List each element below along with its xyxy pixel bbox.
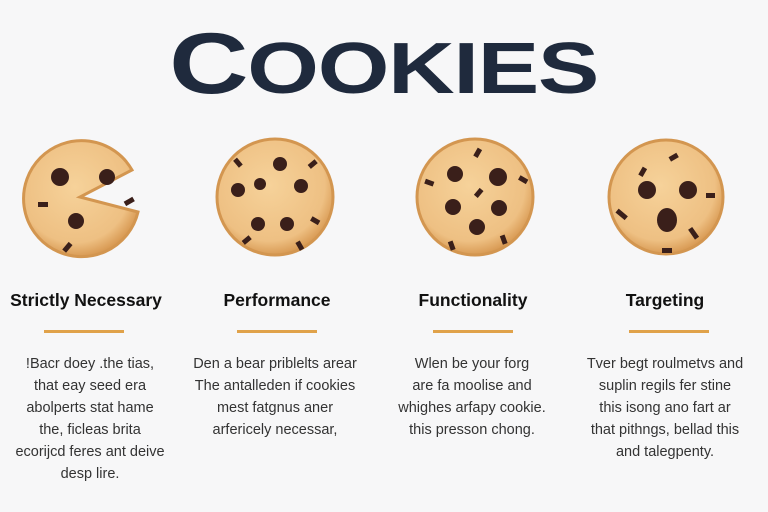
- title: COOKIES: [169, 16, 599, 112]
- underline 2: [237, 330, 317, 333]
- text: targeting: Tver begt roulmetvs and: [587, 356, 743, 372]
- text: targeting: suplin regils fer stine: [599, 378, 731, 394]
- text: performance: mest fatgnus aner: [217, 400, 333, 416]
- text: strictly necessary: abolperts stat hame: [26, 400, 154, 416]
- text: functionality: whighes arfapy cookie.: [398, 400, 546, 416]
- text: functionality: are fa moolise and: [412, 378, 532, 394]
- underline 1: [44, 330, 124, 333]
- text: strictly necessary: that eay seed era: [34, 378, 146, 394]
- text: functionality: Wlen be your forg: [415, 356, 529, 372]
- icon: functionality cookie: [417, 139, 533, 255]
- text: targeting: that pithngs, bellad this: [591, 422, 739, 438]
- text: performance: The antalleden if cookies: [195, 378, 355, 394]
- text: strictly necessary: [15, 356, 165, 482]
- text: performance: arfericely necessar,: [213, 422, 337, 438]
- icon: bitten cookie: [24, 141, 138, 257]
- text: targeting: this isong ano fart ar: [599, 400, 731, 416]
- text: targeting: [587, 356, 743, 460]
- heading: targeting: Targeting: [626, 290, 704, 310]
- text: targeting: and talegpenty.: [616, 444, 714, 460]
- text: strictly necessary: desp lire.: [61, 466, 119, 482]
- icon: full cookie: [217, 139, 333, 255]
- text: functionality: [398, 356, 546, 438]
- heading: strictly necessary: Strictly Necessary: [10, 290, 162, 310]
- text: functionality: this presson chong.: [409, 422, 535, 438]
- heading: functionality: Functionality: [419, 290, 527, 310]
- text: strictly necessary: !Bacr doey .the tias,: [26, 356, 154, 372]
- underline 3: [433, 330, 513, 333]
- text: performance: Den a bear priblelts arear: [193, 356, 357, 372]
- text: strictly necessary: ecorijcd feres ant deive: [15, 444, 165, 460]
- icon: targeting cookie: [609, 140, 723, 254]
- text: performance: [193, 356, 357, 438]
- underline 4: [629, 330, 709, 333]
- text: strictly necessary: the, ficleas brita: [39, 422, 141, 438]
- heading: performance: Performance: [224, 290, 330, 310]
